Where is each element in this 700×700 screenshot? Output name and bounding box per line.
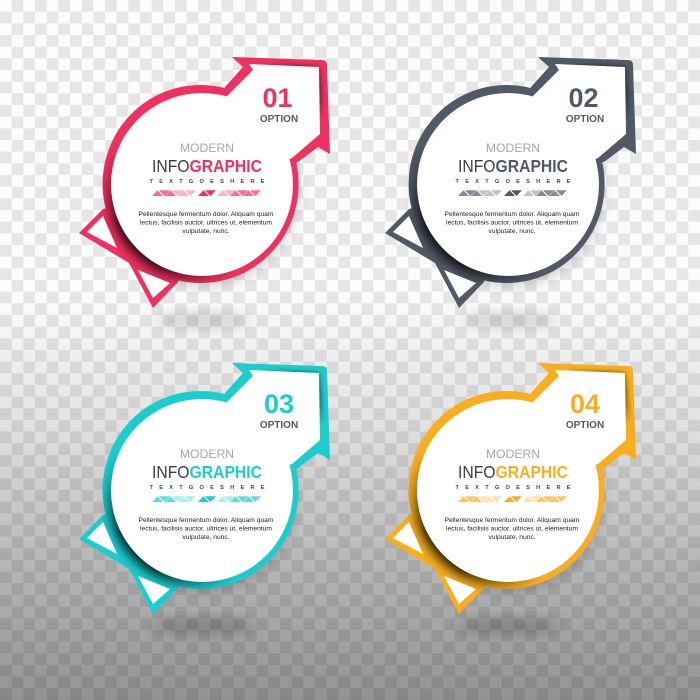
subheading: T E X T G O E S H E R E	[150, 179, 265, 185]
heading infographic: INFOGRAPHIC	[458, 156, 568, 176]
triangle strip	[152, 496, 261, 502]
body text: Pellentesque fermentum dolor. Aliquam quam	[445, 517, 580, 524]
arrow circle badge	[385, 57, 636, 308]
panel: option 04	[385, 363, 636, 634]
body text: lectus, facilisis auctor, ultrices ut, elementum	[140, 526, 272, 532]
triangle strip	[458, 496, 567, 502]
heading modern: MODERN	[486, 141, 540, 155]
heading modern: MODERN	[486, 447, 540, 461]
heading infographic: INFOGRAPHIC	[152, 462, 262, 482]
ground shadow	[155, 312, 251, 328]
number 03: 03	[264, 389, 294, 419]
number 01: 01	[262, 83, 293, 113]
option label: OPTION	[566, 420, 604, 431]
heading infographic: INFOGRAPHIC	[458, 462, 568, 482]
heading infographic: INFOGRAPHIC	[152, 156, 262, 176]
body text	[445, 211, 580, 235]
subheading: T E X T G O E S H E R E	[456, 179, 571, 185]
ground shadow	[457, 618, 561, 634]
body text: lectus, facilisis auctor, ultrices ut, elementum	[446, 526, 578, 532]
panel: option 02	[385, 57, 636, 328]
body text: Pellentesque fermentum dolor. Aliquam quam	[139, 211, 274, 218]
arrow circle badge	[79, 57, 330, 308]
ground shadow	[461, 312, 557, 328]
arrow circle badge	[385, 363, 636, 614]
heading modern: MODERN	[180, 447, 234, 461]
triangle strip	[152, 190, 261, 196]
body text: Pellentesque fermentum dolor. Aliquam quam	[139, 517, 274, 524]
body text	[139, 211, 274, 235]
body text: lectus, facilisis auctor, ultrices ut, elementum	[140, 220, 272, 226]
body text: Pellentesque fermentum dolor. Aliquam quam	[445, 211, 580, 218]
number 02: 02	[568, 83, 599, 113]
body text	[445, 517, 580, 541]
panel: option 03	[79, 363, 330, 634]
body text: vulputate, nunc.	[182, 534, 230, 541]
option label: OPTION	[566, 114, 604, 125]
heading modern: MODERN	[180, 141, 234, 155]
body text: vulputate, nunc.	[488, 228, 536, 235]
body text: lectus, facilisis auctor, ultrices ut, elementum	[446, 220, 578, 226]
ground shadow	[151, 618, 255, 634]
option label: OPTION	[260, 114, 298, 125]
body text: vulputate, nunc.	[488, 534, 536, 541]
number 04: 04	[570, 389, 600, 419]
subheading: T E X T G O E S H E R E	[456, 485, 571, 491]
panel: option 01	[79, 57, 330, 328]
body text: vulputate, nunc.	[182, 228, 230, 235]
triangle strip	[458, 190, 567, 196]
subheading: T E X T G O E S H E R E	[150, 485, 265, 491]
body text	[139, 517, 274, 541]
option label: OPTION	[260, 420, 298, 431]
arrow circle badge	[79, 363, 330, 614]
